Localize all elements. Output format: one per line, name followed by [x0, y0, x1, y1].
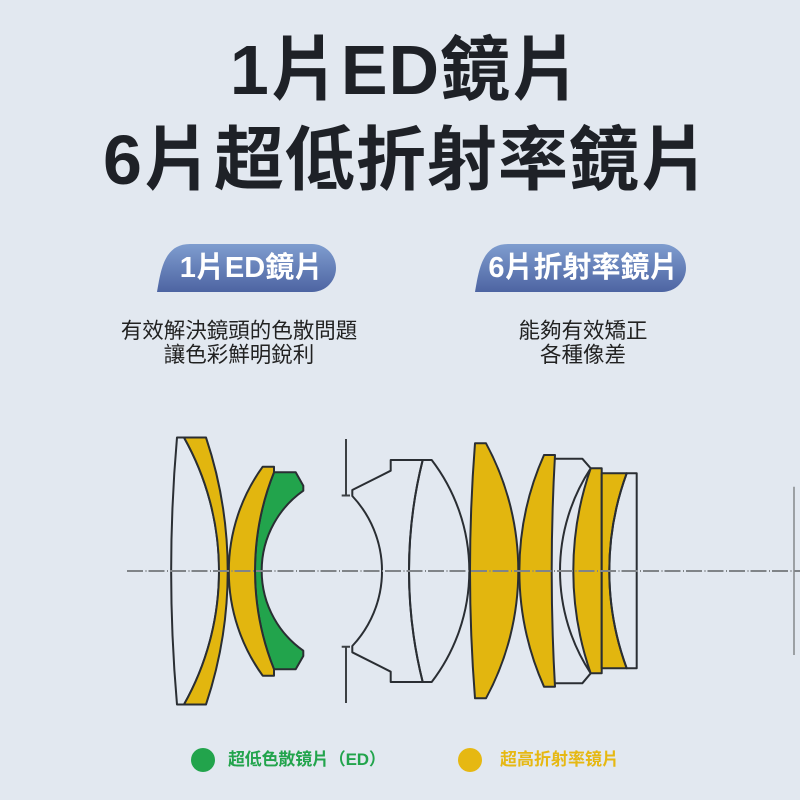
legend label: high refractive: 超高折射率镜片: [500, 750, 619, 769]
title line 2: 6片超低折射率鏡片: [103, 121, 711, 199]
lens 12: white rear element: [609, 473, 637, 668]
lens 4: yellow meniscus: [229, 467, 274, 676]
lens 10: yellow convex: [573, 468, 602, 673]
lens 7: yellow biconvex: [470, 443, 518, 698]
legend: high refractive lens: [458, 748, 619, 772]
text block: refractive lens description: 能夠有效矯正: [518, 319, 648, 343]
lens 9: white meniscus: [555, 459, 591, 683]
lens 5: white cemented element: [352, 460, 423, 682]
badge label: 6 refractive lenses: 6片折射率鏡片: [488, 252, 679, 284]
image plane: [793, 487, 795, 655]
badge label: 1 ED lens: 1片ED鏡片: [180, 252, 323, 284]
title line 1: 1片ED鏡片: [230, 31, 582, 109]
lens 11: yellow concave: [602, 473, 627, 668]
text block: ED lens description: [121, 319, 357, 367]
title: main heading: [103, 31, 711, 199]
icon: green dot: [191, 748, 215, 772]
lens 1: white meniscus: [171, 438, 219, 704]
text block: refractive lens description: 各種像差: [540, 343, 626, 367]
aperture stop: [342, 439, 350, 703]
optical axis: [127, 570, 800, 572]
lens 2: yellow high refractive: [184, 438, 228, 704]
lens 6: white convex element: [409, 460, 469, 682]
badge: pill backgrounds: [157, 244, 686, 292]
text block: ED lens description: 有效解決鏡頭的色散問題: [121, 319, 357, 343]
lens 3: green ED: [255, 472, 303, 669]
icon: yellow dot: [458, 748, 482, 772]
text block: refractive lens description: [518, 319, 648, 367]
legend label: ED: 超低色散镜片（ED）: [228, 750, 386, 769]
text block: ED lens description: 讓色彩鮮明銳利: [164, 343, 314, 367]
legend: ED lens: [191, 748, 386, 772]
lens 8: yellow plano-convex: [519, 455, 555, 687]
